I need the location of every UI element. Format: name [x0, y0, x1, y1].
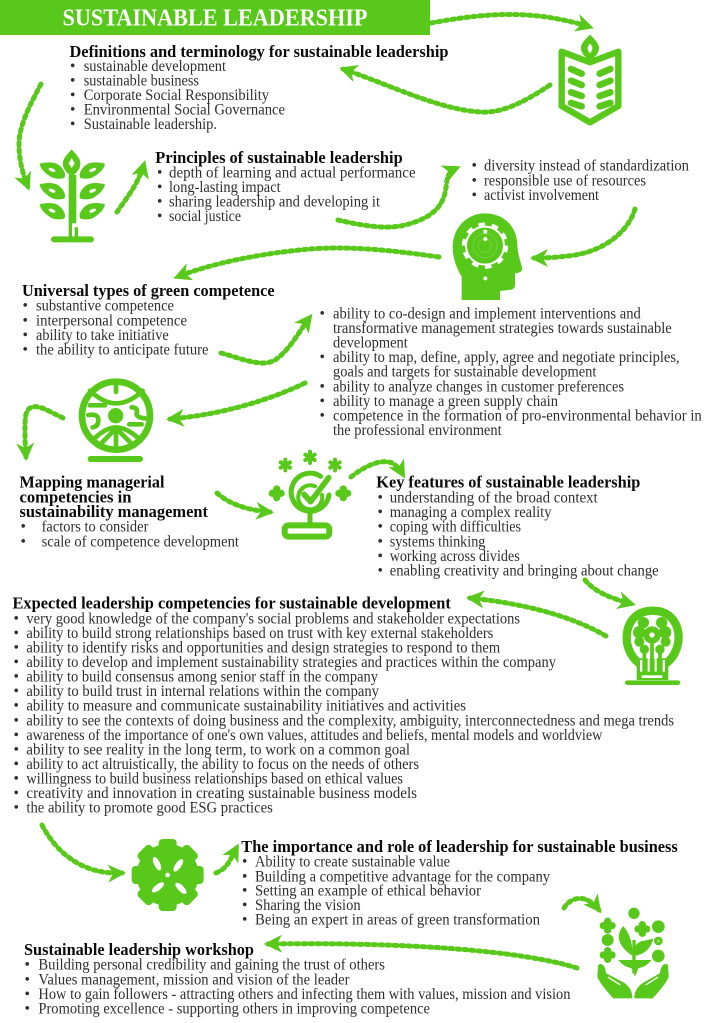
list: expected competencies: • [14, 640, 19, 656]
list: universal types: • [22, 312, 28, 330]
list: importance: • [242, 882, 247, 900]
arrow: tree bulb to expected competencies [470, 598, 606, 636]
list: principles continued: • [472, 172, 477, 190]
list: universal types: interpersonal competence [36, 312, 187, 330]
list: principles continued: diversity instead of standardization [484, 158, 689, 174]
list: key features: working across divides [390, 548, 520, 565]
list: expected competencies: • [14, 727, 19, 744]
list: key features: enabling creativity and bringing about change [390, 562, 659, 580]
icon: book with wheat leaf [562, 34, 618, 122]
list: managerial abilities: • [320, 349, 325, 366]
list: managerial abilities: • [320, 378, 325, 396]
list: definitions: Environmental Social Governance [84, 102, 285, 118]
icon: gear with leaves [132, 839, 204, 911]
icon: wheel [82, 382, 150, 459]
list: principles continued: activist involvement [484, 187, 600, 204]
list: expected competencies: • [14, 770, 19, 788]
list: managerial abilities: goals and targets for sustainable development [333, 364, 597, 380]
list: importance [242, 854, 550, 928]
list: principles continued: • [472, 158, 477, 174]
list: expected competencies: • [14, 741, 19, 758]
list: workshop [24, 956, 571, 1018]
list: importance: • [242, 912, 247, 928]
list: importance: • [242, 868, 247, 886]
list: expected competencies: ability to measure and communicate sustainability initiatives and activities [26, 698, 466, 715]
list: definitions: • [70, 116, 75, 133]
list: importance: Building a competitive advantage for the company [255, 868, 550, 886]
list: importance: Sharing the vision [255, 897, 361, 914]
list: expected competencies: ability to see the contexts of doing business and the complexity, ambiguity, interconnectedness and mega trends [26, 712, 674, 729]
heading: key features: Key features of sustainable leadership [376, 472, 640, 492]
arrow: gear to importance [216, 847, 237, 873]
heading: mapping: sustainability management [20, 502, 208, 521]
list: workshop: Building personal credibility and gaining the trust of others [38, 956, 385, 974]
arrow: expected competencies to gear [42, 825, 122, 873]
list: principles continued: • [472, 187, 477, 204]
list: principles continued: responsible use of resources [484, 172, 646, 190]
list: key features: • [378, 518, 383, 536]
list: expected competencies: ability to act altruistically, the ability to focus on the needs of others [26, 756, 419, 773]
arrow: abilities to wheel [170, 383, 305, 419]
list: workshop: • [24, 956, 30, 974]
list: key features: • [378, 534, 383, 550]
list: managerial abilities: ability to co-design and implement interventions and [333, 306, 641, 322]
list: workshop: • [24, 1000, 30, 1018]
list: key features: understanding of the broad context [390, 490, 598, 506]
list: principles: depth of learning and actual performance [169, 164, 416, 182]
list: expected competencies: ability to develop and implement sustainability strategies and practices within the company [26, 654, 556, 671]
arrow: list to head [534, 209, 635, 258]
list: expected competencies: the ability to promote good ESG practices [26, 800, 273, 816]
list: mapping: • [20, 534, 26, 550]
panel: expected leadership competencies [12, 594, 674, 816]
list: principles continued [472, 158, 689, 204]
title banner [0, 0, 430, 35]
arrow: banner to book [431, 14, 590, 27]
panel: importance and role of leadership [241, 837, 678, 928]
list: definitions: • [70, 58, 75, 75]
list: principles: • [157, 164, 162, 182]
arrow: importance to hands [564, 898, 599, 910]
arrow: mapping to check icon [217, 493, 270, 512]
list: expected competencies: • [14, 654, 19, 671]
list: key features: coping with difficulties [390, 518, 521, 536]
icon: hands holding plant [597, 908, 669, 998]
list: expected competencies: creativity and innovation in creating sustainable business models [26, 785, 417, 802]
heading: mapping: competencies in [20, 488, 132, 506]
list: expected competencies: • [14, 669, 19, 686]
panel: sustainable leadership workshop [24, 940, 571, 1018]
panel: key features [376, 472, 659, 580]
list: principles: sharing leadership and developing it [169, 194, 381, 210]
panel: mapping managerial competencies [20, 472, 240, 550]
list: expected competencies: ability to build strong relationships based on trust with key external stakeholders [26, 625, 493, 642]
list: expected competencies: ability to build trust in internal relations within the company [26, 683, 379, 700]
list: workshop: Values management, mission and vision of the leader [38, 972, 350, 988]
list: definitions: Sustainable leadership. [84, 116, 217, 133]
list: expected competencies: • [14, 800, 19, 816]
list: workshop: • [24, 972, 30, 988]
list: universal types: the ability to anticipate future [36, 342, 209, 358]
arrow: plant to principles [117, 164, 144, 212]
list: principles: • [157, 194, 162, 210]
list: expected competencies: awareness of the importance of one's own values, attitudes and beliefs, mental models and worldview [26, 727, 603, 744]
list: importance: Being an expert in areas of green transformation [255, 912, 540, 928]
list: key features: • [378, 504, 383, 521]
list: mapping [20, 518, 240, 550]
list: principles: • [157, 208, 162, 225]
list: key features: • [378, 490, 383, 506]
heading: definitions: Definitions and terminology for sustainable leadership [70, 42, 448, 61]
list: workshop: • [24, 986, 30, 1003]
list: managerial abilities: • [320, 393, 325, 410]
heading: importance: The importance and role of leadership for sustainable business [241, 837, 678, 856]
icon: plant [41, 149, 103, 239]
list: definitions: • [70, 87, 75, 104]
heading: universal types: Universal types of green competence [22, 281, 275, 300]
list: managerial abilities [320, 306, 702, 439]
list: managerial abilities: the professional environment [333, 422, 502, 439]
list: managerial abilities: development [333, 334, 408, 352]
arrow: book to definitions [343, 69, 550, 112]
list: expected competencies [14, 610, 674, 816]
list: expected competencies: • [14, 625, 19, 642]
arrow: principles to continued list [338, 168, 457, 227]
panel: universal types of green competence [22, 281, 275, 358]
list: expected competencies: ability to build consensus among senior staff in the company [26, 669, 378, 686]
list: universal types [22, 298, 209, 358]
list: importance: Ability to create sustainable value [255, 854, 450, 870]
heading: mapping [20, 472, 208, 521]
list: definitions: • [70, 102, 75, 118]
list: mapping: • [20, 518, 26, 536]
list: mapping: factors to consider [42, 518, 149, 536]
list: importance: Setting an example of ethical behavior [255, 882, 482, 900]
list: definitions: sustainable development [84, 58, 227, 75]
list: key features: • [378, 548, 383, 565]
arrow: universal types to abilities [221, 317, 310, 363]
icon: head with gear [453, 213, 522, 300]
heading: mapping: Mapping managerial [20, 472, 165, 492]
list: mapping: scale of competence development [42, 534, 240, 550]
arrow: definitions to plant [19, 84, 41, 187]
list: expected competencies: • [14, 610, 19, 628]
list: workshop: Promoting excellence - supporting others in improving competence [38, 1000, 430, 1018]
heading: expected competencies: Expected leadership competencies for sustainable development [12, 594, 451, 612]
panel: principles [155, 148, 416, 225]
list: key features: • [378, 562, 383, 580]
list: expected competencies: ability to see reality in the long term, to work on a common goal [26, 741, 410, 758]
icon: check on stand [269, 452, 351, 537]
arrow: wheel to mapping [25, 407, 63, 457]
list: universal types: • [22, 342, 28, 358]
list: expected competencies: • [14, 785, 19, 802]
list: managerial abilities: ability to map, define, apply, agree and negotiate principles, [333, 349, 680, 366]
list: expected competencies: • [14, 712, 19, 729]
list: workshop: How to gain followers - attracting others and infecting them with values, mission and vision [38, 986, 571, 1003]
list: managerial abilities: • [320, 306, 325, 322]
list: definitions [70, 58, 285, 133]
arrow: hands to workshop [268, 944, 577, 968]
heading: principles: Principles of sustainable leadership [155, 148, 403, 167]
list: key features [378, 490, 659, 580]
list: universal types: • [22, 327, 28, 344]
heading: workshop: Sustainable leadership workshop [24, 940, 254, 959]
list: principles: • [157, 179, 162, 196]
list: managerial abilities: • [320, 408, 325, 424]
panel: definitions [70, 42, 448, 133]
title banner: SUSTAINABLE LEADERSHIP [62, 6, 368, 32]
list: expected competencies: • [14, 756, 19, 773]
list: key features: systems thinking [390, 534, 486, 550]
list: expected competencies: willingness to build business relationships based on ethical values [26, 770, 403, 788]
list: expected competencies: very good knowledge of the company's social problems and stakeholder expectations [26, 610, 520, 628]
list: managerial abilities: ability to manage a green supply chain [333, 393, 558, 410]
list: definitions: sustainable business [84, 72, 199, 90]
list: managerial abilities: ability to analyze changes in customer preferences [333, 378, 624, 396]
list: importance: • [242, 897, 247, 914]
list: principles [157, 164, 416, 225]
list: expected competencies: • [14, 683, 19, 700]
list: universal types: substantive competence [36, 298, 174, 314]
list: expected competencies: • [14, 698, 19, 715]
list: universal types: • [22, 298, 28, 314]
list: principles: social justice [169, 208, 241, 225]
list: managerial abilities: competence in the formation of pro-environmental behavior in [333, 408, 702, 424]
list: definitions: • [70, 72, 75, 90]
list: definitions: Corporate Social Responsibility [84, 87, 269, 104]
arrow: head to universal types [177, 248, 439, 277]
arrow: check icon to key features [351, 462, 403, 477]
list: principles: long-lasting impact [169, 179, 281, 196]
list: key features: managing a complex reality [390, 504, 552, 521]
arrow: key features to tree bulb [585, 580, 632, 604]
list: expected competencies: ability to identify risks and opportunities and design strategies to respond to them [26, 640, 500, 656]
list: universal types: ability to take initiative [36, 327, 169, 344]
list: managerial abilities: transformative management strategies towards sustainable [333, 320, 672, 337]
list: importance: • [242, 854, 247, 870]
icon: tree in light bulb [627, 609, 679, 683]
